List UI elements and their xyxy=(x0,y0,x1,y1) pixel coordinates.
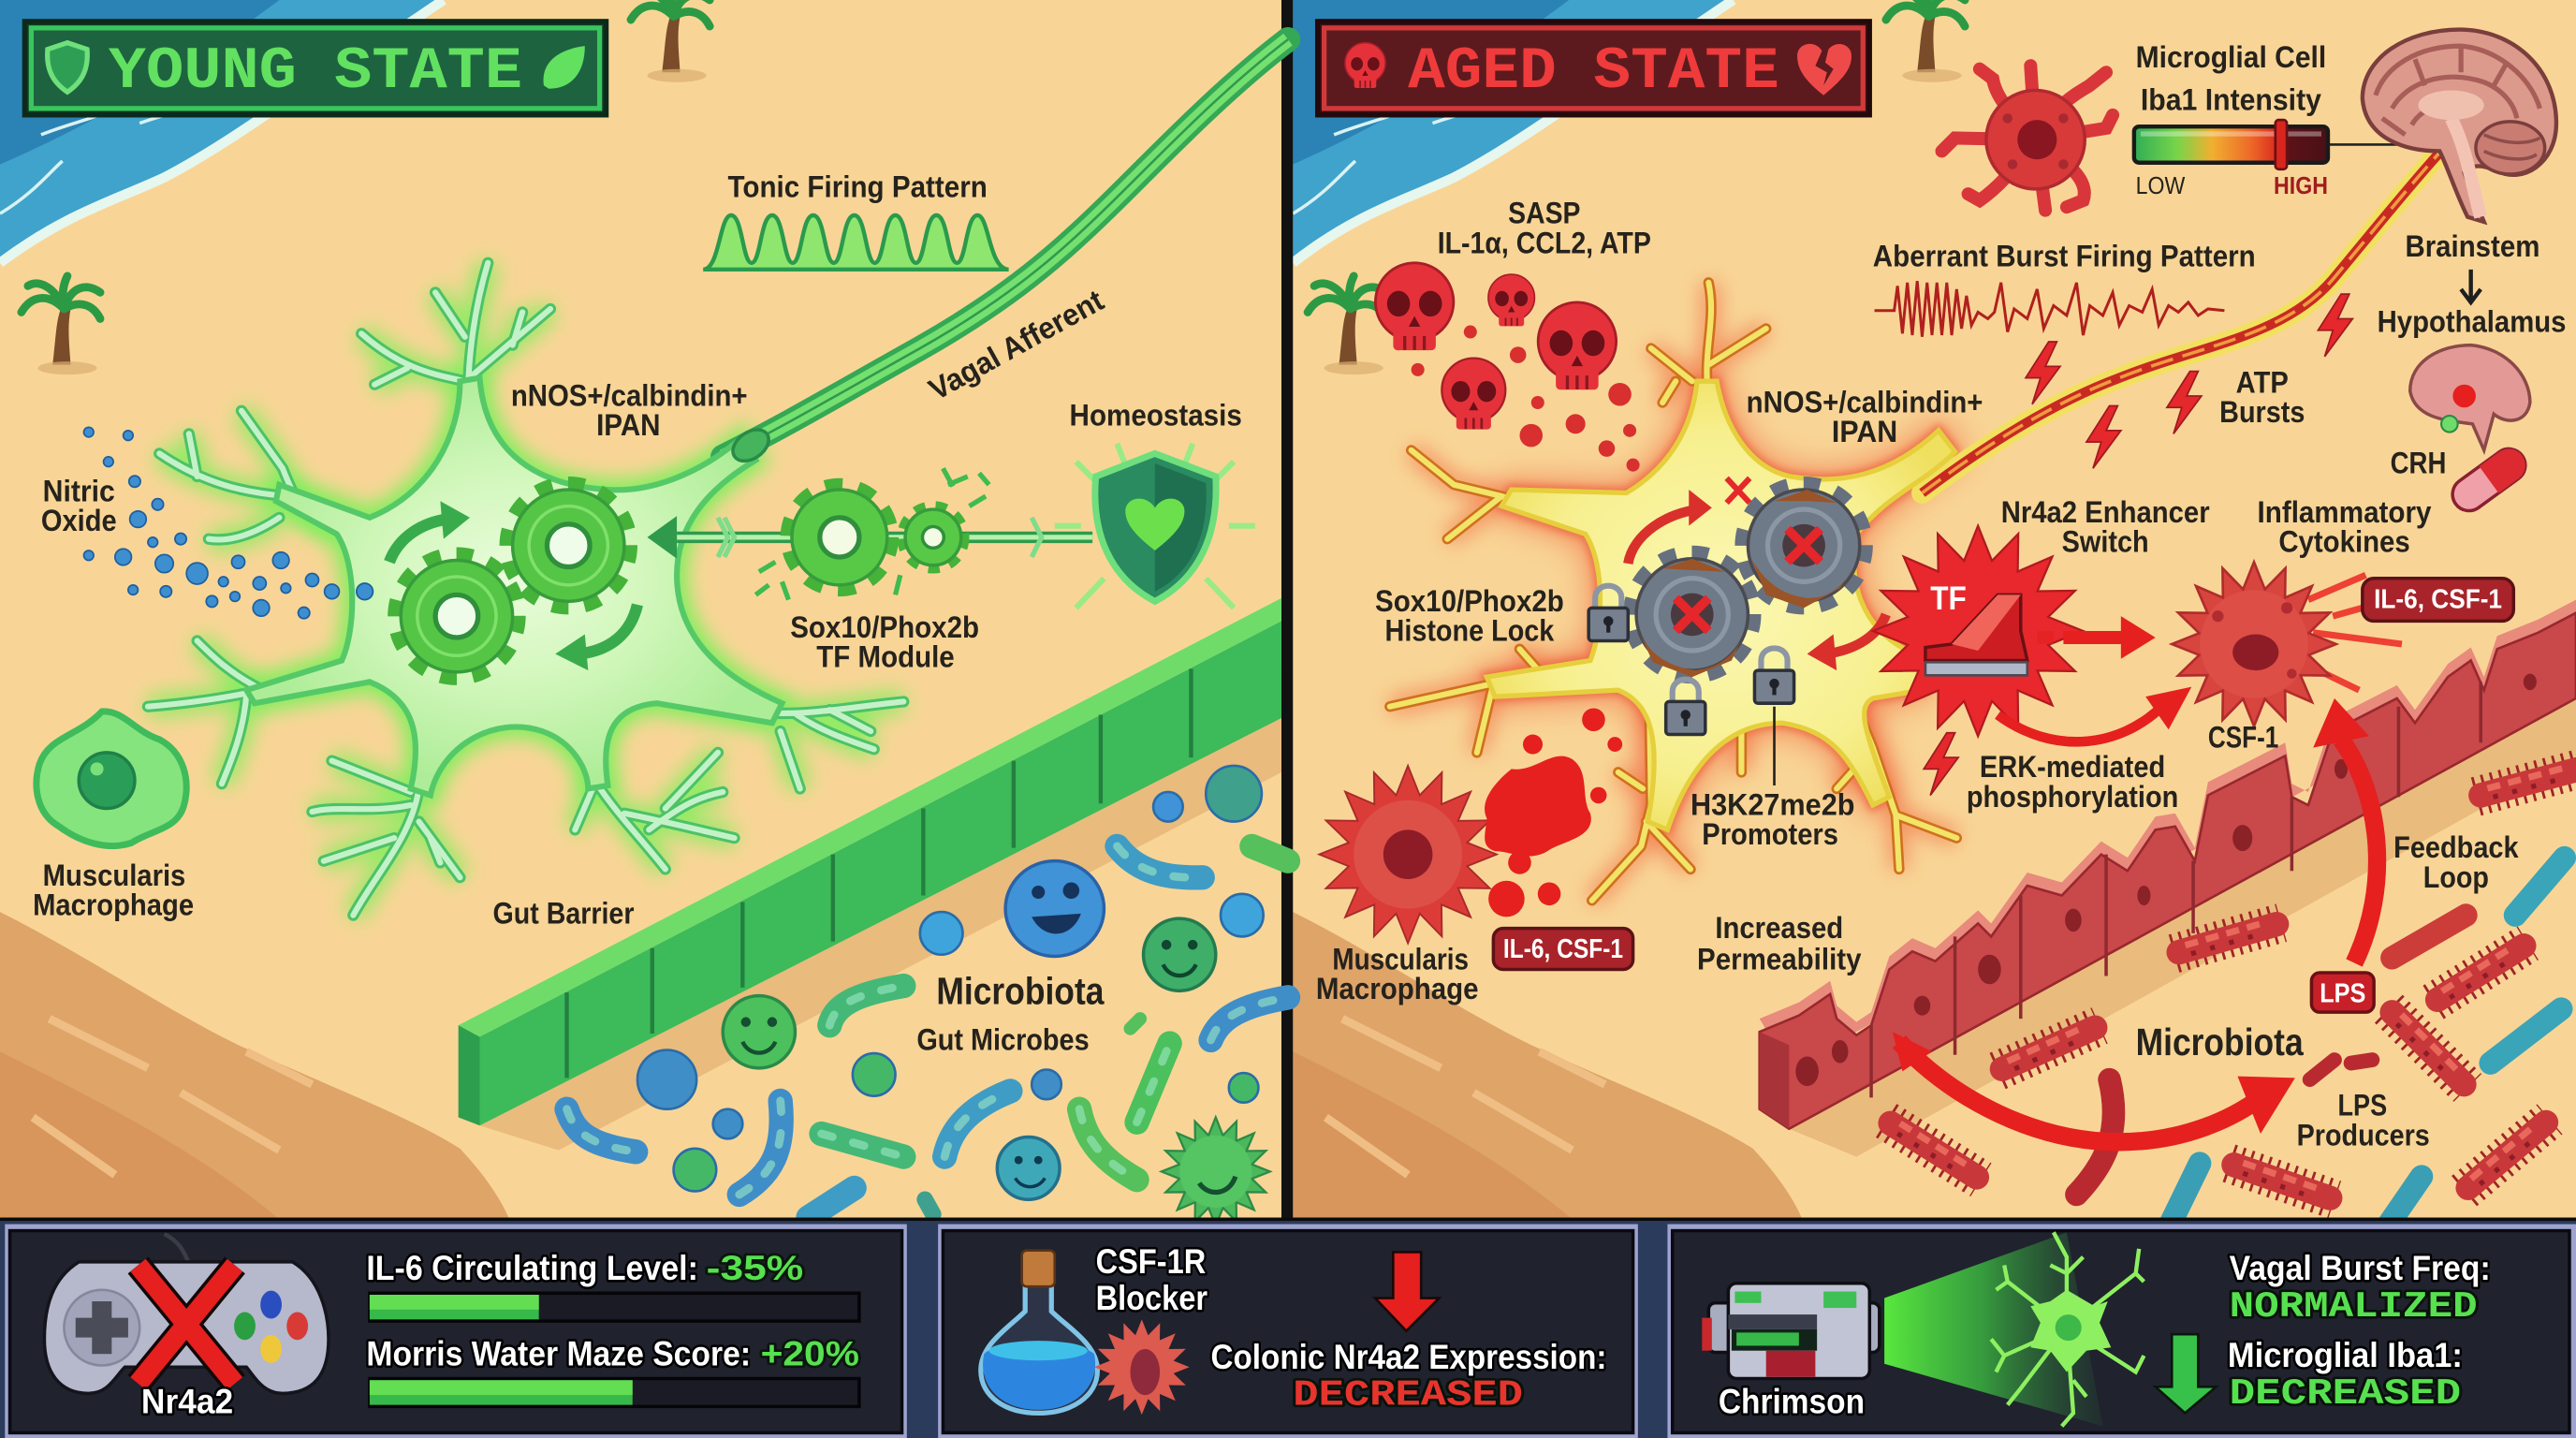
labels: aged panel xyxy=(1316,40,2566,1152)
labels: young panel: Vagal Afferent xyxy=(923,283,1109,406)
left panel beach scenery xyxy=(0,0,710,1219)
tonic firing wave xyxy=(703,215,1009,270)
labels: aged panel: HIGH xyxy=(2274,171,2328,199)
labels: young panel: Microbiota xyxy=(936,969,1105,1012)
arrow: feedback loop xyxy=(2313,698,2378,962)
cytokine pill: IL-6 CSF-1 xyxy=(2363,579,2513,621)
gut barrier: young xyxy=(459,598,1281,1151)
labels: young panel: Gut Microbes xyxy=(916,1023,1090,1057)
labels: young panel: nNOS+/calbindin+ xyxy=(511,379,748,413)
panel: Nr4a2 knockout xyxy=(5,1225,907,1438)
labels: aged panel: Microglial Cell xyxy=(2136,40,2326,74)
labels: aged panel: Nr4a2 Enhancer xyxy=(2001,495,2210,529)
homeostasis shield xyxy=(1055,444,1255,608)
labels: young panel: Nitric xyxy=(43,474,115,507)
right panel beach scenery xyxy=(1293,0,1965,1219)
title: aged state xyxy=(1318,22,1869,115)
young neuron xyxy=(148,39,1288,916)
labels: young panel: IPAN xyxy=(596,408,661,442)
panel: Nr4a2 knockout: +20% xyxy=(761,1334,859,1372)
panel: Chrimson optogenetics xyxy=(1667,1225,2576,1438)
arrow: brainstem to hypothalamus xyxy=(2461,270,2481,302)
microglial cell xyxy=(1942,66,2113,211)
panel: Nr4a2 knockout: IL-6 Circulating Level: xyxy=(366,1249,698,1287)
gears: TF module xyxy=(755,468,989,600)
labels: aged panel: Bursts xyxy=(2219,395,2305,429)
SASP skulls xyxy=(1375,263,1640,472)
panel: Chrimson optogenetics: NORMALIZED xyxy=(2230,1286,2478,1328)
LPS pill xyxy=(2311,973,2374,1012)
gears: young xyxy=(389,488,637,674)
arrow: down red xyxy=(1375,1252,1439,1331)
labels: aged panel: Switch xyxy=(2062,525,2149,559)
labels: aged panel: Brainstem xyxy=(2405,229,2539,263)
panel: CSF-1R blocker: Blocker xyxy=(1096,1279,1208,1317)
labels: aged panel: LPS xyxy=(2338,1089,2387,1123)
labels: aged panel: Aberrant Burst Firing Pattern xyxy=(1873,239,2256,272)
panel: Chrimson optogenetics: DECREASED xyxy=(2230,1373,2461,1415)
CRH pill xyxy=(2446,443,2532,517)
icon: illuminated neuron xyxy=(1991,1232,2144,1426)
labels: young panel: Gut Barrier xyxy=(493,896,635,930)
macrophage pill: IL-6 CSF-1: IL-6, CSF-1 xyxy=(1503,934,1623,964)
icon: blocked cell xyxy=(1094,1319,1190,1415)
labels: young panel: Sox10/Phox2b xyxy=(790,610,979,644)
histone locks xyxy=(1588,586,1794,785)
arrow: switch to cytokine cell xyxy=(2037,616,2156,659)
labels: young panel: Muscularis xyxy=(43,858,185,892)
labels: aged panel: Feedback xyxy=(2393,830,2519,864)
panel: Nr4a2 knockout: -35% xyxy=(707,1249,803,1287)
rusted gears xyxy=(1628,478,1886,677)
arrow: microbiota loop xyxy=(1893,1032,2295,1142)
TF module signal arrow xyxy=(648,516,1092,559)
labels: aged panel: Promoters xyxy=(1702,817,1838,851)
labels: young panel xyxy=(33,170,1242,1057)
labels: young panel: Homeostasis xyxy=(1070,399,1242,433)
title: aged state: AGED STATE xyxy=(1408,37,1779,105)
hypothalamus brain xyxy=(2410,345,2530,450)
axon node xyxy=(727,423,774,467)
labels: aged panel: H3K27me2b xyxy=(1690,788,1855,822)
lightning bolts xyxy=(1924,294,2352,795)
blood splatter xyxy=(1485,708,1622,917)
icon: light device xyxy=(1702,1284,1880,1379)
labels: aged panel: Increased xyxy=(1715,911,1843,945)
nitric oxide particles xyxy=(84,427,373,619)
labels: young panel: Oxide xyxy=(41,504,117,537)
labels: aged panel: LOW xyxy=(2136,171,2185,199)
bar: Morris xyxy=(370,1379,859,1406)
panel: Chrimson optogenetics: Vagal Burst Freq: xyxy=(2230,1249,2491,1287)
icon: potion flask xyxy=(981,1251,1097,1413)
LPS pill: LPS xyxy=(2320,979,2365,1009)
muscularis macrophage: young xyxy=(37,712,186,846)
muscularis macrophage: aged xyxy=(1319,766,1497,943)
labels: aged panel: CSF-1 xyxy=(2208,721,2278,755)
title: young state xyxy=(24,22,607,115)
panel: CSF-1R blocker: Colonic Nr4a2 Expression: xyxy=(1211,1338,1606,1376)
panel: Nr4a2 knockout: Morris Water Maze Score: xyxy=(366,1334,751,1372)
bottom strip background xyxy=(0,1218,2576,1438)
labels: aged panel: SASP xyxy=(1508,197,1580,230)
beam xyxy=(1884,1232,2103,1426)
ERK arrow xyxy=(1998,687,2191,741)
labels: aged panel: Microbiota xyxy=(2136,1020,2304,1064)
microbiota: aged xyxy=(1883,763,2576,1225)
labels: aged panel: phosphorylation xyxy=(1967,780,2178,814)
labels: aged panel: Cytokines xyxy=(2278,525,2410,559)
labels: young panel: TF Module xyxy=(816,640,955,674)
panel divider xyxy=(1281,0,1293,1219)
labels: aged panel: Macrophage xyxy=(1316,972,1479,1005)
broken gut barrier xyxy=(1760,600,2576,1157)
labels: young panel: Tonic Firing Pattern xyxy=(728,170,988,204)
labels: aged panel: Muscularis xyxy=(1332,943,1469,976)
panel: CSF-1R blocker: CSF-1R xyxy=(1096,1242,1206,1281)
labels: aged panel: Loop xyxy=(2423,860,2489,894)
panel: Chrimson optogenetics: Chrimson xyxy=(1719,1382,1865,1420)
macrophage pill: IL-6 CSF-1 xyxy=(1493,929,1633,970)
labels: aged panel: IPAN xyxy=(1832,415,1897,448)
arrow: down green xyxy=(2156,1334,2217,1413)
bar: IL-6 xyxy=(370,1293,859,1321)
inflammatory cell xyxy=(2172,562,2402,726)
labels: young panel: Macrophage xyxy=(33,888,194,922)
TF enhancer switch burst: TF xyxy=(1930,580,1967,617)
labels: aged panel: ERK-mediated xyxy=(1980,750,2165,784)
burst firing wave xyxy=(1875,281,2224,337)
labels: aged panel: CRH xyxy=(2391,446,2446,479)
brain xyxy=(2363,30,2556,222)
labels: aged panel: ATP xyxy=(2236,365,2289,399)
icon: game controller xyxy=(44,1234,329,1393)
panel: CSF-1R blocker: DECREASED xyxy=(1293,1375,1523,1416)
title: young state: YOUNG STATE xyxy=(109,37,522,105)
aged neuron xyxy=(1390,154,2438,901)
cytokine pill: IL-6 CSF-1: IL-6, CSF-1 xyxy=(2374,584,2502,614)
TF enhancer switch burst xyxy=(1873,526,2083,736)
panel: CSF-1R blocker xyxy=(938,1225,1638,1438)
labels: aged panel: Permeability xyxy=(1697,943,1862,976)
labels: aged panel: Iba1 Intensity xyxy=(2141,83,2321,117)
labels: aged panel: Histone Lock xyxy=(1385,613,1555,647)
panel: Nr4a2 knockout: Nr4a2 xyxy=(141,1382,233,1420)
labels: aged panel: nNOS+/calbindin+ xyxy=(1747,386,1983,419)
labels: aged panel: Sox10/Phox2b xyxy=(1375,584,1564,618)
Iba1 intensity meter xyxy=(2134,120,2419,169)
labels: aged panel: Producers xyxy=(2297,1118,2430,1152)
panel: Chrimson optogenetics: Microglial Iba1: xyxy=(2228,1336,2463,1374)
labels: aged panel: IL-1α, CCL2, ATP xyxy=(1438,226,1651,259)
microbiota: young xyxy=(567,766,1288,1225)
labels: aged panel: Inflammatory xyxy=(2258,495,2432,529)
